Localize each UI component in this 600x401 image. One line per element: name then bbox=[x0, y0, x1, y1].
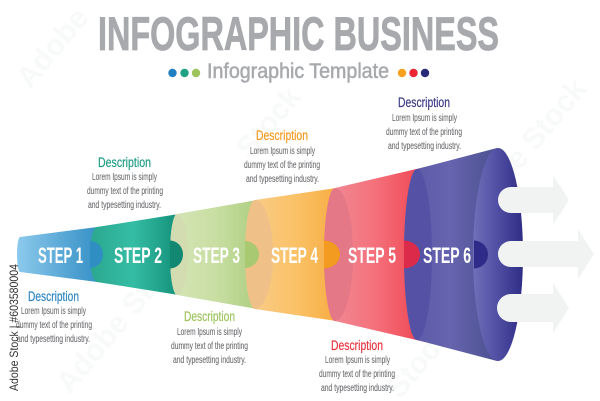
tab: step 5 bbox=[404, 240, 420, 268]
description: step 2: and typesetting industry. bbox=[88, 200, 161, 211]
watermark pattern: Adobe Stock bbox=[450, 73, 593, 234]
description: step 1: Description bbox=[28, 289, 79, 304]
segment: step 2 bbox=[90, 213, 185, 296]
label: step 4: STEP 4 bbox=[271, 243, 318, 268]
label: step 3: STEP 3 bbox=[193, 243, 240, 268]
left colour dots bbox=[168, 69, 200, 77]
description: step 5: Lorem Ipsum is simply bbox=[325, 355, 390, 366]
label: step 6: STEP 6 bbox=[423, 243, 471, 268]
tab: step 6 bbox=[474, 240, 488, 268]
tab: step 1 bbox=[90, 241, 103, 268]
description: step 6 bbox=[386, 95, 462, 152]
description: step 4: and typesetting industry. bbox=[246, 174, 319, 185]
arrow: top bbox=[498, 175, 569, 225]
description: step 4: dummy text of the printing bbox=[244, 160, 320, 171]
description: step 5: and typesetting industry. bbox=[321, 383, 394, 394]
description: step 1: and typesetting industry. bbox=[17, 334, 90, 345]
description: step 3: dummy text of the printing bbox=[171, 341, 248, 352]
description: step 5: dummy text of the printing bbox=[319, 369, 395, 380]
description: step 6: Lorem Ipsum is simply bbox=[392, 113, 457, 124]
right colour dots bbox=[398, 69, 429, 77]
description: step 2 bbox=[87, 155, 163, 211]
band: step 6 bbox=[404, 169, 432, 340]
description: step 5 bbox=[319, 338, 395, 394]
label: step 5: STEP 5 bbox=[348, 243, 396, 268]
description: step 2: Lorem Ipsum is simply bbox=[92, 172, 157, 183]
description: step 5: Description bbox=[331, 338, 383, 353]
band: step 5 bbox=[324, 188, 353, 321]
description: step 6: dummy text of the printing bbox=[386, 127, 462, 138]
end cap ellipse bbox=[473, 148, 523, 361]
description: step 4: Description bbox=[256, 128, 308, 143]
subtitle: Infographic Template bbox=[207, 60, 389, 83]
segment: step 6 bbox=[404, 148, 497, 361]
band: step 4 bbox=[245, 200, 273, 309]
description: step 3: Lorem Ipsum is simply bbox=[177, 327, 242, 338]
band: step 3 bbox=[170, 214, 188, 295]
description: step 3 bbox=[171, 309, 248, 366]
stock id watermark: Adobe Stock | #603580004 bbox=[7, 264, 21, 391]
arrow: middle bbox=[498, 229, 594, 279]
tab: step 3 bbox=[245, 241, 259, 268]
label: step 2: STEP 2 bbox=[114, 243, 162, 268]
arrow: bottom bbox=[497, 283, 569, 333]
description: step 2: Description bbox=[98, 155, 151, 170]
funnel bbox=[17, 148, 523, 361]
watermark pattern: Stock bbox=[230, 80, 308, 164]
watermark pattern: Adobe bbox=[10, 2, 95, 94]
segment: step 1 bbox=[17, 226, 105, 283]
description: step 1 bbox=[16, 289, 92, 345]
segment: step 3 bbox=[170, 199, 263, 310]
description: step 3: and typesetting industry. bbox=[173, 355, 246, 366]
segment: step 5 bbox=[324, 167, 425, 342]
description: step 4 bbox=[244, 128, 320, 185]
description: step 1: Lorem Ipsum is simply bbox=[21, 306, 86, 317]
description: step 2: dummy text of the printing bbox=[87, 186, 163, 197]
tab: step 4 bbox=[324, 240, 340, 268]
description: step 4: Lorem Ipsum is simply bbox=[250, 146, 315, 157]
watermark pattern: Adobe Stock bbox=[50, 238, 193, 399]
label: step 1: STEP 1 bbox=[38, 243, 83, 268]
tab: step 2 bbox=[170, 240, 183, 268]
description: step 6: and typesetting industry. bbox=[388, 141, 461, 152]
segment: step 4 bbox=[245, 187, 343, 322]
description: step 6: Description bbox=[398, 95, 450, 110]
description: step 3: Description bbox=[184, 309, 235, 324]
description: step 1: dummy text of the printing bbox=[16, 320, 92, 331]
